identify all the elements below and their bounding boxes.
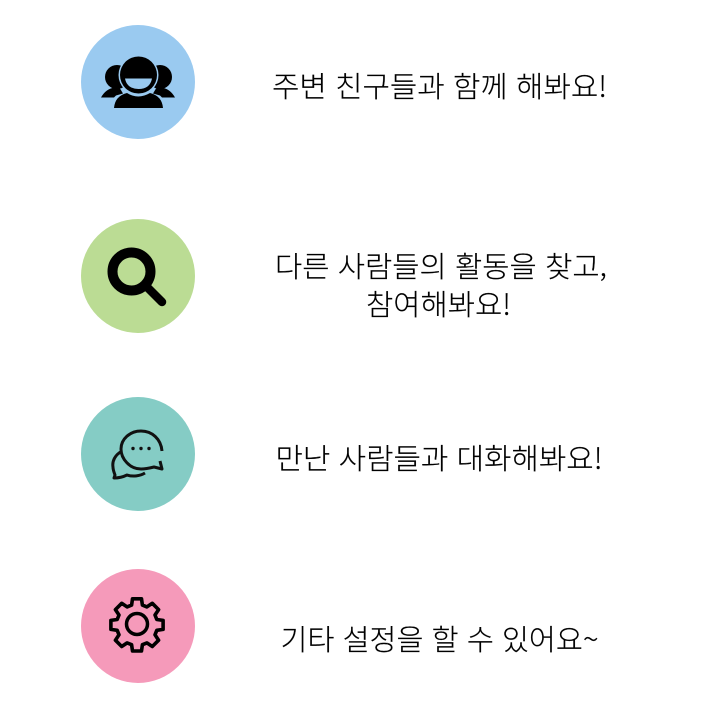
icon: speech bubbles [81,397,195,511]
row: friends [81,25,607,139]
text: chat: 만난 사람들과 대화해봐요! [276,436,602,478]
icon: magnifying glass [81,219,195,333]
icon: group of people [81,25,195,139]
text: search: 참여해봐요! [366,282,511,324]
text: search [275,244,607,324]
row: search [81,219,607,333]
row: settings [81,569,598,683]
row: chat [81,397,602,511]
text: friends: 주변 친구들과 함께 해봐요! [272,64,607,106]
icon: gear [81,569,195,683]
text: settings: 기타 설정을 할 수 있어요~ [280,617,598,659]
text: search: 다른 사람들의 활동을 찾고, [275,244,607,286]
